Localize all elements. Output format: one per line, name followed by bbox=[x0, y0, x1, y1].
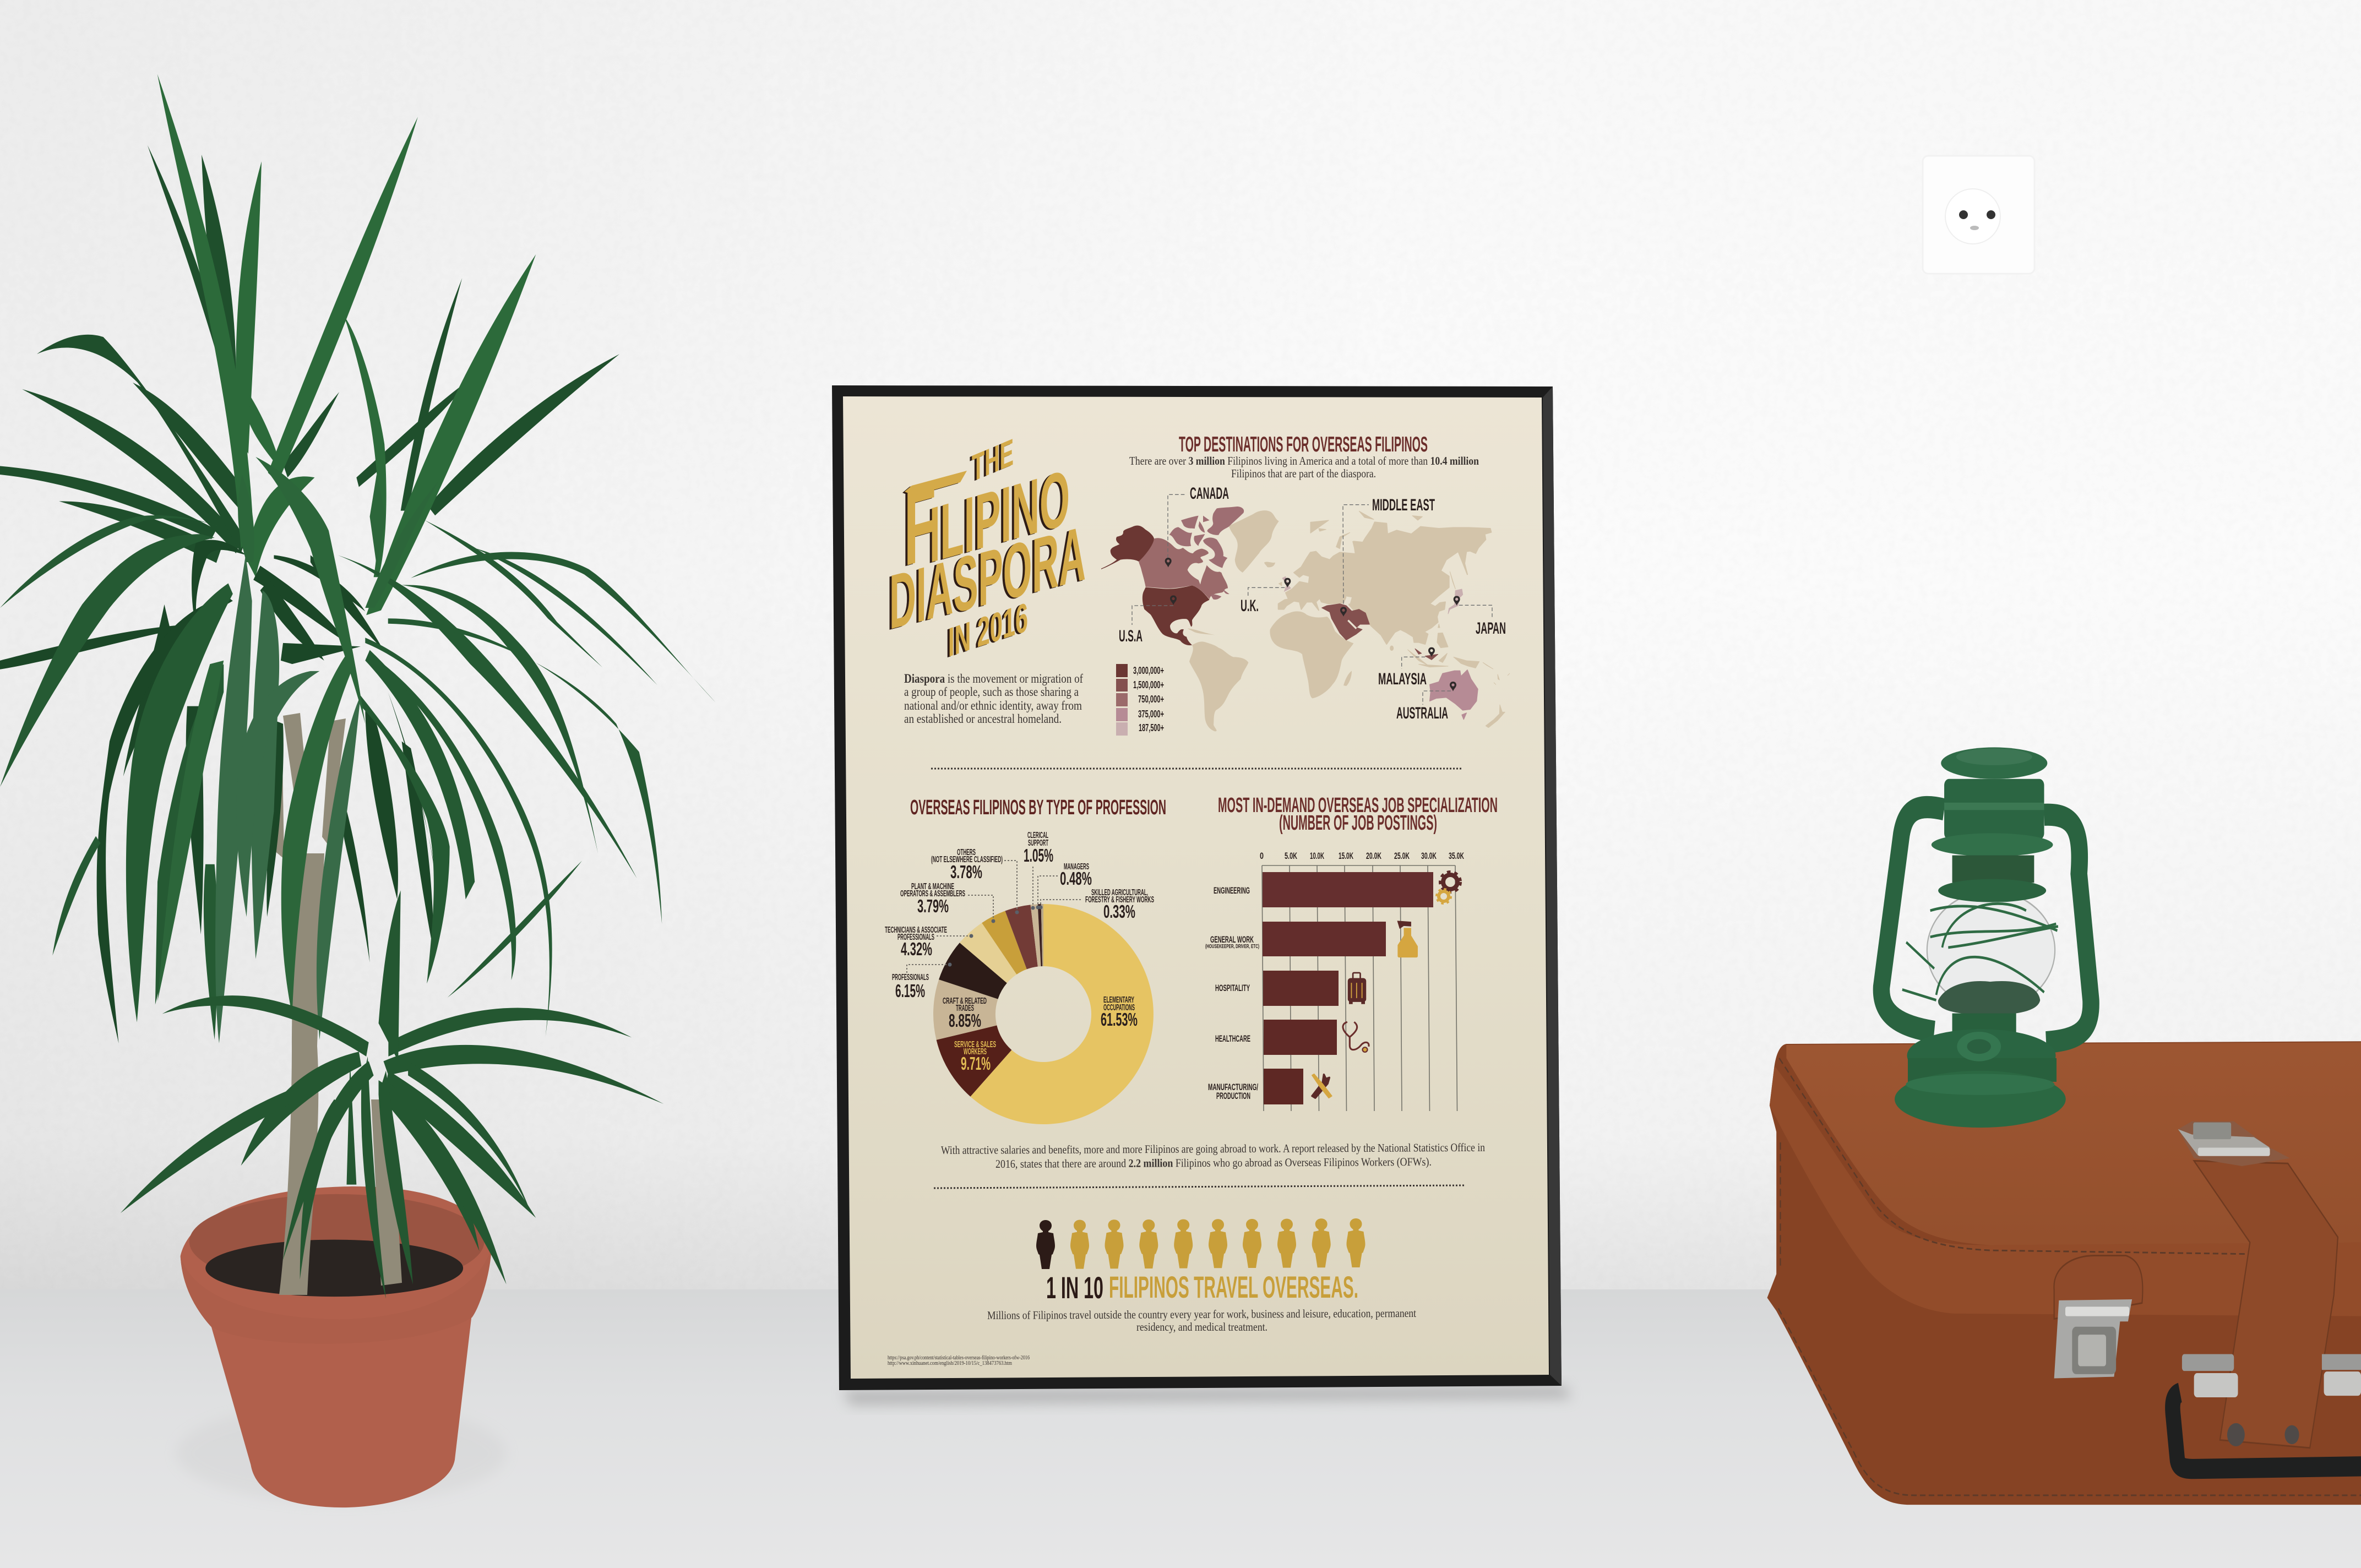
headline: 1 in 10: 1 IN 10 bbox=[1046, 1270, 1103, 1305]
text: OFW report: With attractive salaries and benefits, more and more Filipinos are going abroad to work. A report released by the National Statistics Office in bbox=[941, 1141, 1485, 1157]
icon: stethoscope bbox=[1343, 1022, 1369, 1052]
floor bbox=[0, 1289, 2361, 1568]
donut labels: 3.78% bbox=[950, 862, 982, 882]
leader lines bbox=[907, 861, 1082, 974]
donut labels: OCCUPATIONS bbox=[1103, 1003, 1135, 1012]
pictogram: 1 in 10 people bbox=[1036, 1218, 1366, 1269]
axis labels: 35.0K bbox=[1449, 851, 1464, 861]
map: eastern hemisphere bbox=[1279, 511, 1510, 728]
chart grid bbox=[1262, 865, 1457, 1111]
text: sources bbox=[888, 1355, 1030, 1366]
lantern glass bbox=[1927, 891, 2055, 1009]
heading: type of profession: OVERSEAS FILIPINOS BY TYPE OF PROFESSION bbox=[910, 796, 1166, 819]
suitcase lid top bbox=[1786, 1042, 2361, 1245]
category labels: ENGINEERING bbox=[1214, 885, 1250, 896]
suitcase buckle bbox=[2178, 1121, 2290, 1166]
donut labels: PROFESSIONALS bbox=[897, 933, 934, 942]
map: Baja gulf bbox=[1149, 614, 1156, 627]
axis labels bbox=[1260, 851, 1464, 861]
suitcase clasp bbox=[2054, 1256, 2142, 1379]
slice: others bbox=[1005, 905, 1038, 969]
suitcase lid side bbox=[1770, 1066, 2361, 1316]
donut labels: 0.48% bbox=[1060, 868, 1092, 889]
lantern burner bbox=[1938, 981, 2040, 1015]
suitcase handle bbox=[2173, 1354, 2361, 1469]
map: Middle East bbox=[1322, 604, 1369, 640]
title: The Filipino Diaspora in 2016: F bbox=[904, 463, 936, 589]
category labels: MANUFACTURING/ bbox=[1208, 1082, 1258, 1092]
text: OFW report bbox=[941, 1141, 1485, 1170]
axis labels: 5.0K bbox=[1285, 851, 1297, 861]
poster paper bbox=[843, 396, 1549, 1379]
donut labels bbox=[885, 831, 1154, 1074]
donut labels: WORKERS bbox=[964, 1047, 987, 1057]
axis labels: 0 bbox=[1260, 851, 1264, 861]
map legend: 375,000+ bbox=[1138, 709, 1164, 720]
bar chart bbox=[1205, 851, 1464, 1111]
map: Australia bbox=[1430, 670, 1478, 720]
donut chart bbox=[907, 861, 1154, 1124]
donut labels: SERVICE & SALES bbox=[954, 1040, 996, 1049]
heading: in-demand jobs: MOST IN-DEMAND OVERSEAS JOB SPECIALIZATION bbox=[1218, 794, 1498, 817]
pot shadow bbox=[176, 1404, 507, 1503]
map: Canada bbox=[1139, 538, 1228, 599]
text: definition of diaspora: a group of people, such as those sharing a bbox=[904, 685, 1079, 699]
donut labels: SUPPORT bbox=[1028, 839, 1048, 848]
text: DIASPORA bbox=[889, 510, 1086, 646]
map: Canada islands bbox=[1169, 507, 1244, 600]
donut labels: 9.71% bbox=[961, 1053, 991, 1074]
poster shadow on floor bbox=[842, 1385, 1572, 1405]
map labels: U.S.A bbox=[1119, 627, 1143, 645]
donut labels: PROFESSIONALS bbox=[892, 973, 929, 982]
category labels bbox=[1205, 885, 1259, 1101]
map labels: AUSTRALIA bbox=[1396, 704, 1448, 722]
icon: spray bottle bbox=[1397, 921, 1418, 957]
plant leaves: lower rosette bbox=[121, 890, 663, 1299]
suitcase strap bbox=[2194, 1161, 2338, 1448]
donut labels: TRADES bbox=[956, 1004, 974, 1013]
category labels: HOSPITALITY bbox=[1215, 983, 1250, 993]
bars bbox=[1263, 872, 1433, 1104]
slice: professionals bbox=[939, 943, 1007, 999]
poster frame bbox=[832, 385, 1562, 1390]
headline: 1 in 10 bbox=[1046, 1270, 1358, 1305]
text: definition of diaspora: Diaspora is the movement or migration of bbox=[904, 672, 1083, 685]
world map bbox=[1101, 494, 1510, 731]
slice: clerical bbox=[1031, 904, 1041, 967]
text: destinations intro: Filipinos that are part of the diaspora. bbox=[1231, 467, 1376, 480]
icon: wall socket bbox=[1923, 156, 2034, 274]
text: sources: https://psa.gov.ph/content/statistical-tables-overseas-filipino-workers-ofw-2016 bbox=[888, 1355, 1030, 1361]
map: Japan bbox=[1448, 589, 1463, 614]
map labels: CANADA bbox=[1190, 484, 1229, 503]
donut labels: 3.79% bbox=[917, 896, 949, 916]
heading: in-demand jobs bbox=[1218, 794, 1498, 835]
axis labels: 25.0K bbox=[1394, 851, 1410, 861]
map: inland seas bbox=[1346, 596, 1352, 604]
icon: suitcase bbox=[1348, 973, 1366, 1004]
map labels bbox=[1119, 484, 1506, 722]
headline: 1 in 10: FILIPINOS TRAVEL OVERSEAS. bbox=[1109, 1270, 1358, 1304]
slice: craft bbox=[933, 979, 998, 1040]
axis labels: 10.0K bbox=[1310, 851, 1324, 861]
slice: elementary occupations bbox=[970, 904, 1154, 1124]
map legend: 1,500,000+ bbox=[1133, 679, 1164, 690]
map legend bbox=[1116, 664, 1164, 736]
slice: service and sales bbox=[937, 1025, 1011, 1097]
axis labels: 15.0K bbox=[1339, 851, 1353, 861]
category labels: HEALTHCARE bbox=[1215, 1033, 1250, 1044]
text: travel reasons: residency, and medical treatment. bbox=[1136, 1320, 1267, 1333]
leader dots bbox=[948, 905, 1043, 967]
suitcase body bbox=[1767, 1041, 2361, 1505]
slice: skilled agricultural bbox=[1041, 904, 1043, 966]
donut labels: PLANT & MACHINE bbox=[911, 882, 954, 891]
axis labels: 20.0K bbox=[1366, 851, 1381, 861]
lantern base bbox=[1895, 1014, 2066, 1128]
suitcase bbox=[1767, 747, 2361, 1505]
plant leaves: upper fans bbox=[0, 74, 619, 615]
title: The Filipino Diaspora in 2016: ILIPINO bbox=[929, 453, 1070, 579]
heading: in-demand jobs: (NUMBER OF JOB POSTINGS) bbox=[1279, 812, 1437, 835]
donut labels: CLERICAL bbox=[1027, 831, 1048, 840]
map legend: 187,500+ bbox=[1139, 722, 1164, 733]
donut labels: TECHNICIANS & ASSOCIATE bbox=[885, 925, 947, 935]
donut labels: 61.53% bbox=[1101, 1009, 1138, 1030]
donut labels: MANAGERS bbox=[1064, 862, 1089, 872]
donut labels: 0.33% bbox=[1103, 901, 1135, 922]
axis labels: 30.0K bbox=[1421, 851, 1437, 861]
lantern cage bbox=[1902, 903, 2058, 1000]
text: sources: http://www.xinhuanet.com/english/2019-10/15/c_138473763.htm bbox=[888, 1360, 1012, 1366]
map: UK and Ireland bbox=[1279, 576, 1291, 592]
text: destinations intro: There are over 3 million Filipinos living in America and a total of more than 10.4 million bbox=[1129, 454, 1479, 467]
text: travel reasons bbox=[987, 1306, 1416, 1333]
heading: top destinations: TOP DESTINATIONS FOR OVERSEAS FILIPINOS bbox=[1179, 433, 1428, 456]
map: other land west bbox=[1188, 510, 1353, 731]
map labels: MIDDLE EAST bbox=[1372, 496, 1435, 514]
text: OFW report: 2016, states that there are around 2.2 million Filipinos who go abroad as Overseas Filipinos Workers (OFWs). bbox=[995, 1155, 1432, 1170]
map: USA and Alaska bbox=[1101, 525, 1210, 645]
title: The Filipino Diaspora in 2016 bbox=[889, 431, 1086, 666]
donut labels: 4.32% bbox=[901, 939, 932, 959]
icon: gears bbox=[1437, 872, 1460, 903]
text: definition of diaspora: an established or ancestral homeland. bbox=[904, 712, 1062, 726]
text: definition of diaspora: national and/or ethnic identity, away from bbox=[904, 699, 1082, 712]
icon: wrench and screwdriver bbox=[1312, 1074, 1332, 1098]
plant trunks bbox=[269, 713, 402, 1295]
donut labels: ELEMENTARY bbox=[1103, 995, 1134, 1005]
map: location pins bbox=[1165, 558, 1460, 692]
plant in pot bbox=[0, 74, 716, 1507]
map: Malaysia bbox=[1415, 649, 1438, 660]
donut labels: 6.15% bbox=[895, 981, 925, 1001]
map: connector lines bbox=[1132, 494, 1492, 705]
text: definition of diaspora bbox=[904, 672, 1083, 726]
lantern arms bbox=[1881, 807, 2091, 1042]
slice: technicians bbox=[960, 923, 1016, 983]
donut labels: OTHERS bbox=[957, 848, 976, 857]
donut labels: 8.85% bbox=[949, 1010, 981, 1031]
title: The Filipino Diaspora in 2016: IN 2016 bbox=[948, 594, 1028, 666]
text: destinations intro bbox=[1129, 454, 1479, 480]
donut labels: (NOT ELSEWHERE CLASSIFIED) bbox=[931, 855, 1003, 864]
donut labels: SKILLED AGRICULTURAL, bbox=[1091, 888, 1148, 897]
category labels: GENERAL WORK bbox=[1210, 934, 1254, 945]
map legend: 3,000,000+ bbox=[1133, 665, 1164, 676]
plant leaves: hanging bbox=[0, 457, 716, 1043]
slice: plant operators bbox=[982, 911, 1027, 974]
plant pot bbox=[181, 1186, 492, 1507]
map: islands bbox=[1310, 511, 1510, 728]
donut labels: 1.05% bbox=[1024, 845, 1053, 865]
donut labels: OPERATORS & ASSEMBLERS bbox=[900, 889, 965, 899]
map labels: JAPAN bbox=[1476, 619, 1506, 638]
lantern cap bbox=[1932, 747, 2053, 902]
donut labels: FORESTRY & FISHERY WORKS bbox=[1085, 895, 1154, 905]
donut labels: CRAFT & RELATED bbox=[943, 997, 987, 1006]
title: The Filipino Diaspora in 2016: THE bbox=[972, 431, 1014, 490]
map legend: 750,000+ bbox=[1138, 694, 1164, 705]
category labels: PRODUCTION bbox=[1216, 1091, 1250, 1101]
map labels: MALAYSIA bbox=[1378, 670, 1427, 688]
category labels: (HOUSEKEEPER, DRIVER, ETC) bbox=[1205, 944, 1259, 950]
lantern bbox=[1881, 747, 2091, 1128]
slice: managers bbox=[1038, 904, 1042, 966]
map labels: U.K. bbox=[1241, 597, 1259, 615]
text: travel reasons: Millions of Filipinos travel outside the country every year for work, business and leisure, education, permanent bbox=[987, 1306, 1416, 1322]
map: Eurasia bbox=[1279, 522, 1491, 644]
